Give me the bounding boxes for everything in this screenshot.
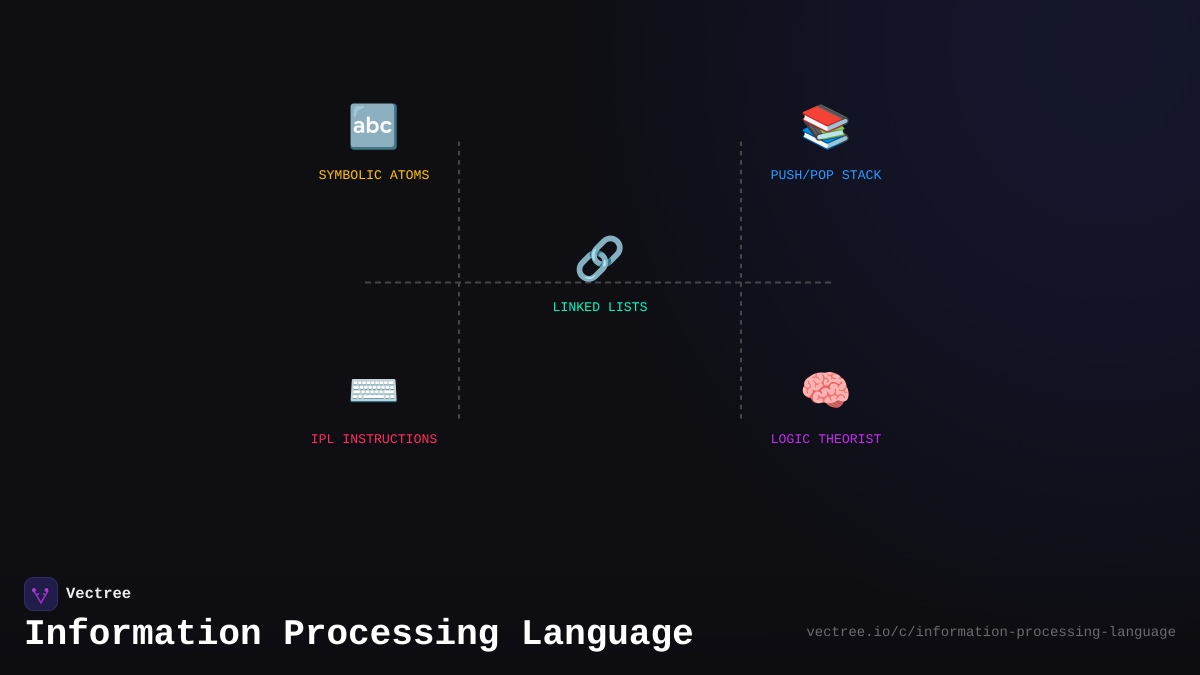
node: symbolic atoms: SYMBOLIC ATOMS [319,168,429,183]
source URL: vectree.io/c/information-processing-language [806,625,1176,641]
node: logic theorist [771,367,881,447]
node: push/pop stack: PUSH/POP STACK [771,168,881,183]
icon: Vectree logo [24,577,58,611]
node: IPL instructions [311,367,437,447]
node: push/pop stack [771,103,882,183]
logo: Vectree brand mark and name [24,577,131,611]
node: linked lists: 🔗 [574,235,626,284]
node: logic theorist: 🧠 [800,367,852,416]
title: Information Processing Language [24,614,694,655]
node: IPL instructions: IPL INSTRUCTIONS [311,432,437,447]
node: logic theorist: LOGIC THEORIST [771,432,881,447]
node: symbolic atoms: 🔤 [348,103,400,152]
brand name: Vectree [66,585,131,603]
node: push/pop stack: 📚 [800,103,852,152]
node: symbolic atoms [319,103,429,183]
node: linked lists [553,235,647,315]
node: IPL instructions: ⌨️ [348,367,400,416]
node: linked lists: LINKED LISTS [553,300,647,315]
